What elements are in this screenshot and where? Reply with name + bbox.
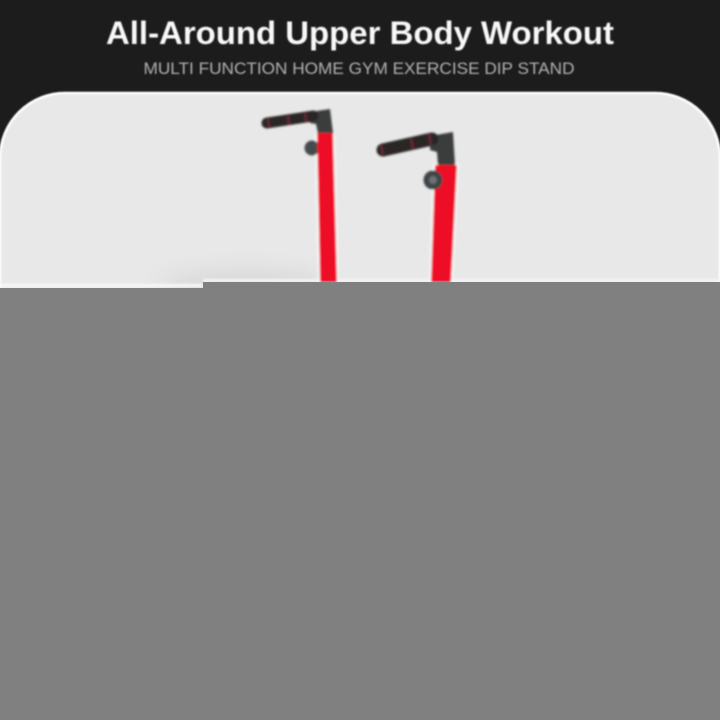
grey placeholder block <box>0 282 720 720</box>
dip bar: right upright <box>381 132 459 282</box>
dip bar: left upright <box>267 109 339 282</box>
bottom glow: left <box>0 284 203 287</box>
floor shadow <box>2 270 718 288</box>
left foam grip <box>267 116 313 123</box>
header background <box>0 0 720 300</box>
title: All-Around Upper Body Workout <box>106 15 614 51</box>
subtitle: MULTI FUNCTION HOME GYM EXERCISE DIP STAND <box>144 59 574 78</box>
bottom glow: right <box>203 279 720 282</box>
left red post <box>317 133 337 282</box>
right foam grip <box>383 139 432 150</box>
left knob <box>304 140 320 156</box>
left post halo <box>315 134 339 282</box>
right grip accents <box>381 134 431 155</box>
panel: product photo <box>0 93 720 304</box>
right post halo <box>429 164 459 282</box>
right knob centre <box>429 176 437 184</box>
left dark bracket <box>310 109 333 133</box>
right knob <box>424 170 442 190</box>
right red post <box>431 165 457 282</box>
left grip accents <box>268 113 306 127</box>
right dark bracket <box>430 132 455 165</box>
